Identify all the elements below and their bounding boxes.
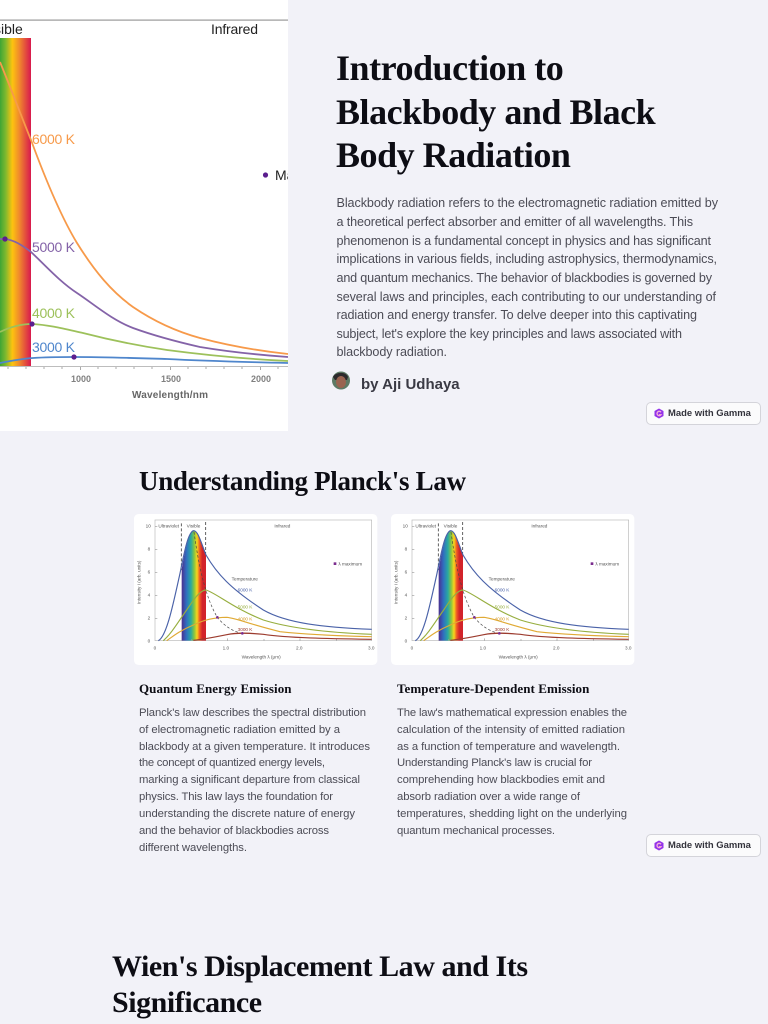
card image: Planck curves (right): Infrared — [531, 524, 548, 529]
badge: made with gamma (top) — [646, 402, 761, 425]
card image: Planck curves (right): 10 — [403, 524, 408, 529]
intro paragraph: implications in various fields, including astrophysics, thermodynamics, — [336, 252, 717, 266]
card image: Planck curves (right): 2.0 — [553, 645, 560, 650]
intro paragraph: a theoretical perfect absorber and emitter of all wavelengths. This — [336, 215, 693, 229]
card image: Planck curves (left): Infrared — [274, 524, 291, 529]
card image: Planck curves (left): λ maximum — [338, 561, 362, 566]
card image: Planck curves (left) — [134, 514, 378, 665]
card image: Planck curves (right): 6 — [405, 570, 408, 575]
author name: by Aji Udhaya — [361, 376, 460, 393]
chart labels: 1000 — [71, 374, 91, 384]
chart labels: 4000 K — [32, 305, 76, 321]
chart labels: 1500 — [161, 374, 181, 384]
badge: made with gamma (bottom) — [646, 834, 761, 857]
card image: Planck curves (right): Ultraviolet — [415, 524, 437, 529]
chart labels: 3000 K — [32, 339, 76, 355]
card image: Planck curves (left): 6000 K — [238, 587, 253, 592]
title: Blackbody and Black — [336, 92, 655, 132]
hero image: blackbody spectrum chart — [0, 0, 288, 431]
card image: Planck curves (left): 2.0 — [296, 645, 303, 650]
intro paragraph: several laws and principles, each contributing to our understanding of — [336, 290, 716, 304]
card image: Planck curves (left): 0 — [148, 638, 151, 643]
card image: Planck curves (right): 1.0 — [480, 645, 487, 650]
intro paragraph — [336, 196, 719, 359]
chart labels: Infrared — [211, 21, 258, 37]
card image: Planck curves (left): 3000 K — [238, 627, 253, 632]
card image: Planck curves (right): 0 — [405, 638, 408, 643]
card image: Planck curves (left): 4 — [148, 593, 151, 598]
card heading: temperature-dependent emission: Temperature-Dependent Emission — [397, 681, 589, 696]
section heading: Wien's law: Significance — [112, 986, 262, 1019]
card text: temperature-dependent emission: as a function of temperature and wavelength. — [397, 741, 620, 753]
card text: quantum energy emission — [139, 707, 370, 854]
intro paragraph: radiation and energy transfer. To delve deeper into this captivating — [336, 308, 697, 322]
card text: quantum energy emission: different wavelengths. — [139, 842, 247, 854]
badge: made with gamma (bottom): Made with Gamma — [668, 840, 751, 851]
title: Body Radiation — [336, 135, 570, 175]
curve: 6000 K — [0, 62, 288, 354]
section heading: Wien's law — [112, 950, 528, 1019]
card image: Planck curves (right): 5000 K — [495, 604, 510, 609]
card text: temperature-dependent emission: comprehending how blackbodies emit and — [397, 774, 605, 786]
card image: Planck curves (left): 2 — [148, 616, 151, 621]
card image: Planck curves (right) — [391, 514, 634, 665]
card image: Planck curves (right): 8 — [405, 547, 408, 552]
card image: Planck curves (left): Intensity I (arb. units) — [137, 560, 142, 604]
card image: Planck curves (right): 2 — [405, 616, 408, 621]
intro paragraph: phenomenon is a fundamental concept in physics and has significant — [336, 234, 712, 248]
intro paragraph: blackbody radiation. — [336, 345, 447, 359]
card image: Planck curves (right): 3.0 — [625, 645, 632, 650]
chart labels: 2000 — [251, 374, 271, 384]
card text: temperature-dependent emission: absorb radiation over a wide range of — [397, 791, 581, 803]
chart labels: 5000 K — [32, 239, 76, 255]
badge: made with gamma (top): Made with Gamma — [668, 408, 751, 419]
section heading: Planck's law: Understanding Planck's Law — [139, 466, 466, 496]
card image: Planck curves (right): 0 — [411, 645, 414, 650]
card text: quantum energy emission: physics. This law lays the foundation for — [139, 791, 333, 803]
card text: temperature-dependent emission: Understanding Planck's law is crucial for — [397, 757, 592, 769]
card image: Planck curves (left): Ultraviolet — [158, 524, 180, 529]
card image: Planck curves (left): Visible — [187, 524, 201, 529]
card image: Planck curves (right): Wavelength λ (μm) — [499, 654, 538, 659]
card image: Planck curves (right): 3000 K — [495, 627, 510, 632]
curve: 5000 K — [0, 239, 288, 357]
card text: quantum energy emission: marking a significant departure from classical — [139, 774, 360, 786]
chart labels: 6000 K — [32, 131, 76, 147]
card heading: quantum energy emission: Quantum Energy Emission — [139, 681, 292, 696]
card text: quantum energy emission: blackbody at a given temperature. It introduces — [139, 741, 370, 753]
curve: 3000 K — [0, 357, 288, 363]
card image: Planck curves (left): 6 — [148, 570, 151, 575]
card text: quantum energy emission: and the behavior of blackbodies across — [139, 825, 329, 837]
intro paragraph: and quantum mechanics. The behavior of blackbodies is governed by — [336, 271, 713, 285]
intro paragraph: Blackbody radiation refers to the electromagnetic radiation emitted by — [336, 196, 719, 210]
author avatar — [332, 372, 350, 390]
card image: Planck curves (left): 4000 K — [238, 616, 253, 621]
card image: Planck curves (right): Intensity I (arb. units) — [394, 560, 399, 604]
card image: Planck curves (left): 5000 K — [238, 604, 253, 609]
axis ticks — [8, 367, 278, 370]
card text: quantum energy emission: Planck's law describes the spectral distribution — [139, 707, 366, 719]
intro paragraph: subject, let's explore the key principles and laws associated with — [336, 327, 682, 341]
card text: temperature-dependent emission: quantum mechanical processes. — [397, 825, 555, 837]
card image: Planck curves (left): 8 — [148, 547, 151, 552]
card image: Planck curves (left): 0 — [154, 645, 157, 650]
card text: quantum energy emission: of electromagnetic radiation emitted by a — [139, 724, 341, 736]
section heading: Wien's law: Wien's Displacement Law and Its — [112, 950, 528, 983]
card text: temperature-dependent emission: temperatures, shedding light on the underlying — [397, 808, 627, 820]
title: Introduction to — [336, 48, 563, 88]
card image: Planck curves (left): 3.0 — [368, 645, 375, 650]
card image: Planck curves (right): Visible — [444, 524, 458, 529]
card text: temperature-dependent emission: calculation of the intensity of emitted radiation — [397, 724, 625, 736]
chart labels — [0, 21, 295, 401]
card text: temperature-dependent emission: The law's mathematical expression enables the — [397, 707, 627, 719]
card text: temperature-dependent emission — [397, 707, 627, 837]
card image: Planck curves (left): Temperature — [232, 576, 258, 581]
title — [336, 48, 656, 175]
spectrum band — [0, 38, 31, 366]
card image: Planck curves (right): λ maximum — [595, 561, 619, 566]
card text: quantum energy emission: the concept of quantized energy levels, — [139, 757, 325, 769]
card image: Planck curves (left): 1.0 — [223, 645, 230, 650]
card image: Planck curves (right): 4000 K — [495, 616, 510, 621]
chart labels: Wavelength/nm — [132, 390, 208, 401]
card image: Planck curves (right): 6000 K — [495, 587, 510, 592]
card image: Planck curves (right): Temperature — [489, 576, 515, 581]
card image: Planck curves (right): 4 — [405, 593, 408, 598]
card text: quantum energy emission: understanding the discrete nature of energy — [139, 808, 355, 820]
maximum markers — [2, 172, 268, 360]
curve: 4000 K — [0, 324, 288, 361]
card image: Planck curves (left): 10 — [146, 524, 151, 529]
card image: Planck curves (left): Wavelength λ (μm) — [242, 654, 281, 659]
